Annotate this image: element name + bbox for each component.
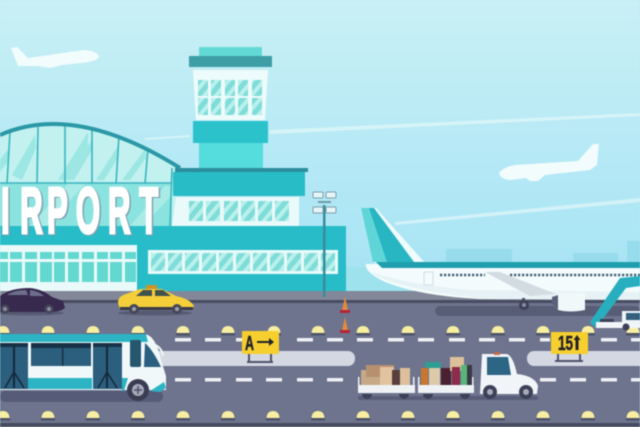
airliner: fuselage [366, 262, 640, 300]
road medians [150, 351, 640, 366]
airliner: landing gear [519, 298, 529, 310]
runway lights [0, 326, 640, 420]
tower windows [198, 80, 262, 115]
bus: body [0, 334, 166, 390]
baggage: cart 1 [358, 377, 415, 399]
plane: upper left silhouette [11, 47, 99, 68]
airliner: wing [485, 272, 556, 296]
bus: shadow [0, 391, 163, 402]
baggage: cart 2 [418, 377, 474, 399]
terminal: dome glass [0, 124, 180, 226]
control tower [189, 47, 272, 169]
airliner: ground shadow [435, 306, 640, 316]
terminal building [0, 124, 346, 294]
baggage: cart 1 load [361, 365, 410, 386]
terminal: dome frame [0, 126, 172, 226]
bus: mirror [150, 343, 163, 356]
baggage: tractor [480, 352, 538, 399]
baggage: shadow [358, 396, 538, 400]
jet bridge and service truck [590, 276, 640, 330]
lamp post [313, 192, 336, 297]
airliner [361, 208, 640, 316]
apron and road [0, 291, 640, 427]
traffic cones [340, 296, 350, 333]
contrails [145, 113, 640, 225]
terminal: lower section [0, 226, 346, 294]
sign: gate A: A [245, 333, 254, 355]
bus: wheel [127, 379, 149, 401]
sign: gate 15: 15 [558, 333, 573, 355]
plane: upper right silhouette [499, 144, 599, 181]
terminal: upper section [175, 168, 308, 172]
sign: gate 15 [551, 332, 588, 362]
airliner: engine [552, 293, 585, 312]
bus: windows [0, 343, 28, 389]
sign: gate A [242, 331, 279, 363]
distant skyline [345, 241, 640, 297]
airliner: door [424, 272, 433, 285]
dark car [0, 288, 65, 316]
airliner: window row [440, 274, 640, 276]
shuttle bus [0, 334, 166, 402]
terminal: entrance [0, 245, 137, 291]
baggage: cart 2 load [421, 357, 472, 385]
baggage tractor and carts [358, 352, 538, 400]
airliner: tail fin [361, 208, 425, 263]
sky background [0, 0, 640, 300]
yellow taxi [118, 285, 194, 316]
lane dashes [175, 338, 640, 382]
